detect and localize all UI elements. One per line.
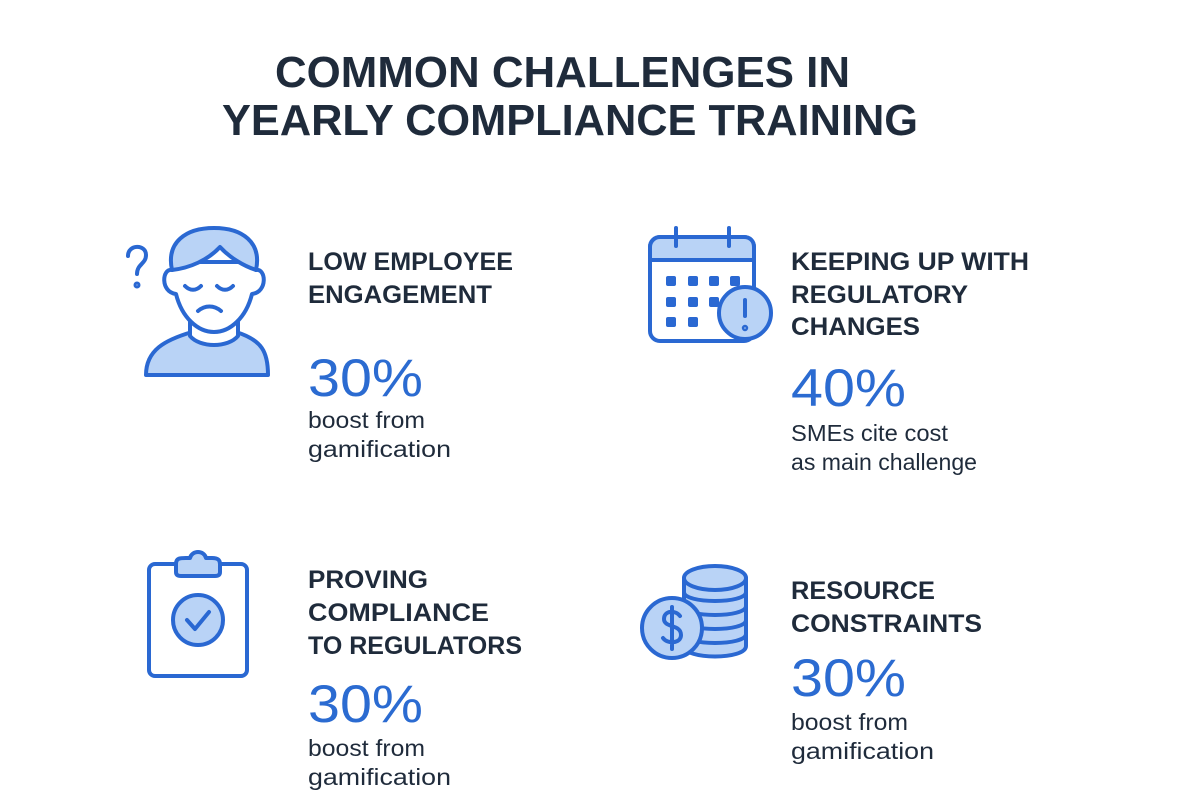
title: COMMON CHALLENGES IN [275, 48, 850, 97]
panel: resource constraints: boost from [791, 709, 908, 735]
panel: regulatory changes: CHANGES [791, 313, 920, 341]
panel: resource constraints: CONSTRAINTS [791, 610, 982, 638]
panel: proving compliance [149, 552, 522, 790]
panel: low employee engagement [128, 228, 513, 462]
panel: proving compliance: boost from [308, 735, 425, 761]
panel: resource constraints: gamification [791, 738, 934, 764]
panel: low employee engagement: LOW EMPLOYEE [308, 248, 513, 276]
panel: regulatory changes: KEEPING UP WITH [791, 248, 1029, 276]
title: YEARLY COMPLIANCE TRAINING [222, 96, 918, 145]
icon: confused person [128, 228, 268, 375]
panel: regulatory changes: SMEs cite cost [791, 420, 949, 446]
panel: resource constraints: 30% [791, 649, 906, 708]
title [222, 48, 918, 145]
panel: proving compliance: PROVING [308, 566, 428, 594]
panel: regulatory changes: as main challenge [791, 449, 977, 475]
panel: resource constraints: RESOURCE [791, 577, 935, 605]
panel: regulatory changes [650, 228, 1029, 475]
panel: regulatory changes: REGULATORY [791, 281, 968, 309]
panel: proving compliance: COMPLIANCE [308, 599, 489, 627]
icon: clipboard check [149, 552, 247, 676]
icon: calendar with alert [650, 228, 771, 341]
panel: proving compliance: TO REGULATORS [308, 632, 522, 660]
panel: proving compliance: 30% [308, 675, 423, 734]
panel: low employee engagement: gamification [308, 436, 451, 462]
panel: low employee engagement: ENGAGEMENT [308, 281, 492, 309]
panel: proving compliance: gamification [308, 764, 451, 790]
panel: resource constraints [642, 566, 982, 764]
panel: low employee engagement: 30% [308, 349, 423, 408]
panel: regulatory changes: 40% [791, 359, 906, 418]
icon: coins [642, 566, 746, 658]
panel: low employee engagement: boost from [308, 407, 425, 433]
